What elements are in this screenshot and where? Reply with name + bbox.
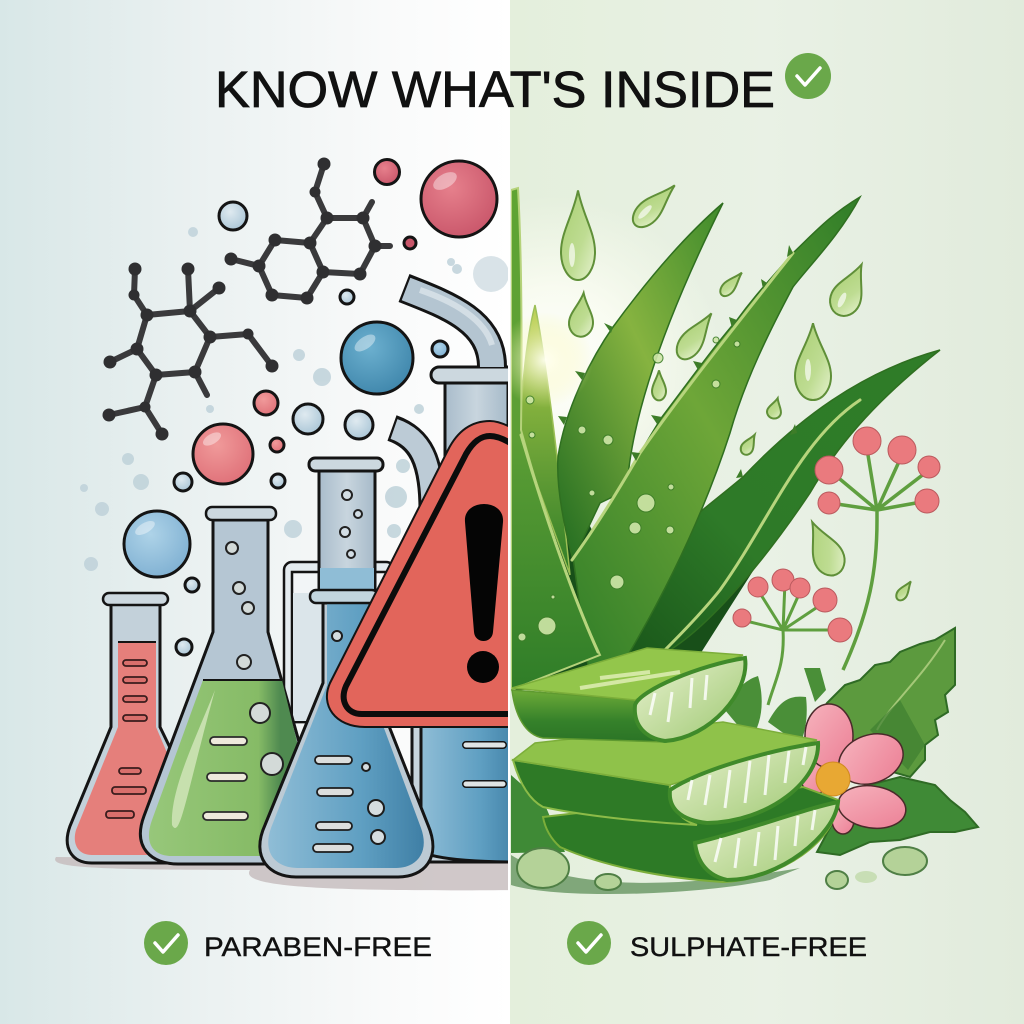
drop highlights <box>569 204 848 381</box>
beaker behind <box>284 562 394 722</box>
ground shadow <box>511 855 800 894</box>
aloe slice: bottom <box>543 787 838 882</box>
aloe leaf: right <box>632 349 940 652</box>
aloe leaf: large <box>573 197 860 680</box>
aloe leaf: inner left <box>521 305 570 575</box>
glass tube: upper <box>404 288 492 367</box>
title: KNOW WHAT'S INSIDE <box>215 61 775 118</box>
lower serrated leaf <box>817 777 978 855</box>
big serrated leaf <box>800 628 955 777</box>
pink flower <box>801 704 910 834</box>
flask: green <box>138 506 300 866</box>
callout: paraben-free <box>144 921 432 965</box>
glass tube: lower <box>392 428 432 510</box>
sun flare on leaves <box>511 317 591 404</box>
tall cylinder: right <box>410 366 508 864</box>
shadow under flasks <box>55 857 520 890</box>
flask: red <box>67 593 210 863</box>
bubbles: outlined <box>124 160 497 655</box>
faded background bubbles <box>80 227 509 571</box>
molecule: upper structure <box>224 158 390 304</box>
aloe slice: middle <box>513 722 818 825</box>
panel: chemistry illustration <box>55 158 530 890</box>
dark interior between leaves <box>515 516 754 690</box>
panel: aloe illustration <box>511 184 980 894</box>
light rims on leaves <box>521 253 860 660</box>
leaf behind slices at left <box>511 775 565 853</box>
icon: check badge right <box>567 921 611 965</box>
callout: sulphate-free <box>567 921 867 965</box>
aloe leaf: tall centre <box>558 203 723 560</box>
spines <box>558 245 797 478</box>
cylinder: centre <box>309 458 383 593</box>
flask: blue <box>260 590 433 877</box>
bubble highlights <box>133 168 460 538</box>
icon: check badge left <box>144 921 188 965</box>
sun glow <box>522 236 676 463</box>
water beads <box>517 847 927 890</box>
panel: right background <box>510 0 1024 1024</box>
flower cluster: lower <box>733 569 852 705</box>
label: sulphate-free: SULPHATE-FREE <box>630 932 867 962</box>
panel: left background <box>0 0 510 1024</box>
aloe leaf: left edge <box>511 188 600 690</box>
flower cluster: upper <box>815 427 940 670</box>
label: paraben-free: PARABEN-FREE <box>204 932 432 962</box>
molecule: left structure <box>102 262 278 440</box>
icon: title check badge <box>785 53 831 99</box>
falling drops <box>561 177 915 603</box>
icon: warning triangle <box>327 421 530 727</box>
small leaves behind slices <box>726 668 826 736</box>
droplets on leaves <box>518 337 740 641</box>
aloe slice: top <box>512 648 745 742</box>
